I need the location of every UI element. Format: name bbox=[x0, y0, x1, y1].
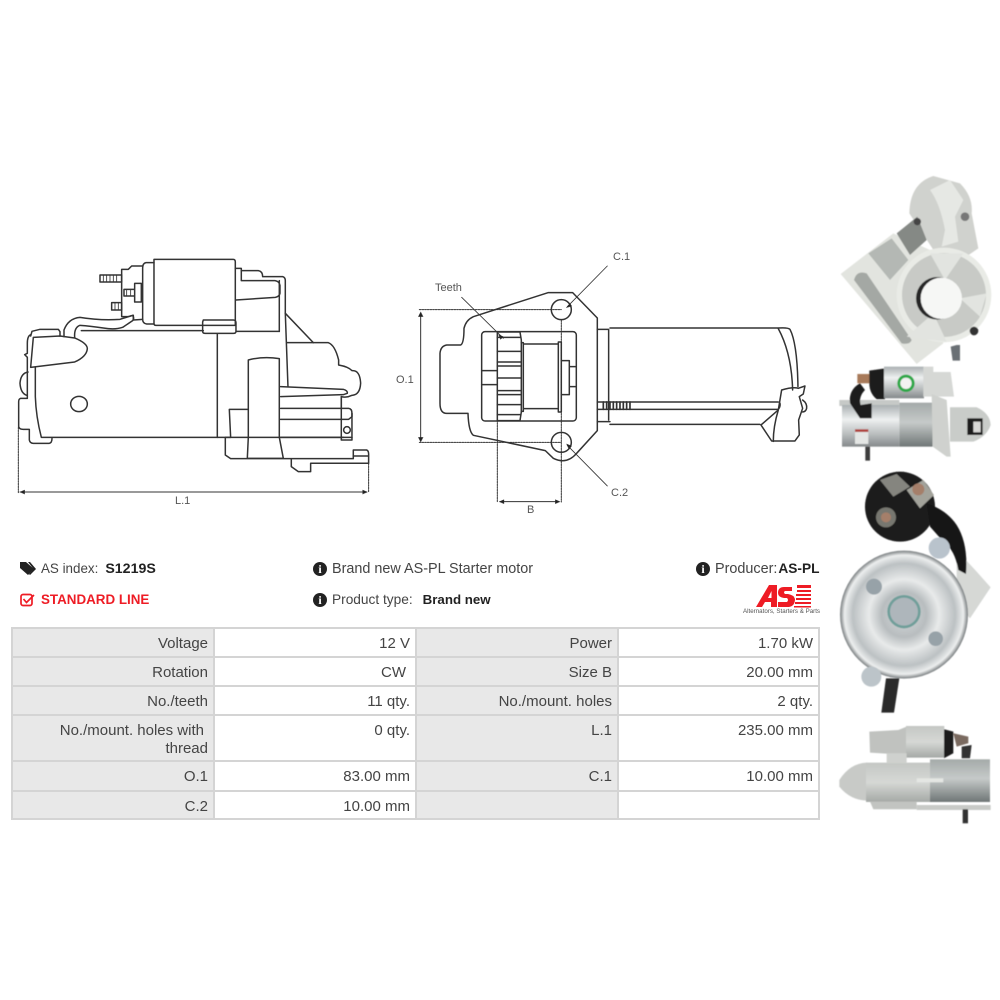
dimension lines bbox=[419, 310, 561, 502]
row: teeth / mount holes bbox=[13, 687, 818, 714]
row: voltage / power bbox=[13, 629, 818, 656]
row: threaded holes / L.1: L.1 bbox=[591, 722, 612, 739]
solenoid bbox=[154, 259, 235, 325]
row: rotation / size B: 20.00 mm bbox=[746, 664, 813, 681]
row: O.1 / C.1 bbox=[13, 762, 818, 790]
drive housing bbox=[285, 313, 313, 343]
photo: starter motor side view with green label bbox=[839, 367, 991, 461]
row: teeth / mount holes: 11 qty. bbox=[367, 693, 410, 710]
row: threaded holes / L.1 bbox=[13, 716, 818, 760]
motor housing bbox=[597, 329, 610, 422]
text: logo tagline: Alternators, Starters & Parts bbox=[743, 608, 820, 615]
row: rotation / size B: Rotation bbox=[152, 664, 208, 681]
row: rotation / size B: CW bbox=[381, 664, 406, 681]
text: drawing label Teeth: Teeth bbox=[435, 282, 462, 294]
text: standard line: STANDARD LINE bbox=[41, 592, 149, 607]
row: rotation / size B: Size B bbox=[569, 664, 612, 681]
photo: starter motor rear view with solenoid bbox=[840, 472, 991, 713]
text: brand new starter motor: Brand new AS-PL Starter motor bbox=[332, 561, 533, 577]
L.1 dimension lines bbox=[18, 427, 369, 493]
row: voltage / power: Power bbox=[569, 635, 612, 652]
specification table bbox=[11, 627, 820, 820]
row: voltage / power: Voltage bbox=[158, 635, 208, 652]
row: teeth / mount holes: No./mount. holes bbox=[499, 693, 612, 710]
row: teeth / mount holes: 2 qty. bbox=[777, 693, 813, 710]
row: O.1 / C.1: C.1 bbox=[589, 768, 612, 785]
row: C.2 bbox=[13, 792, 818, 818]
text: brand new starter motor: i bbox=[318, 562, 322, 576]
motor body bbox=[64, 315, 134, 337]
text: drawing label C.1: C.1 bbox=[613, 251, 630, 263]
row: threaded holes / L.1: 0 qty. bbox=[374, 722, 410, 739]
mounting flange bbox=[440, 293, 597, 461]
row: rotation / size B bbox=[13, 658, 818, 685]
text: producer: Producer:AS-PL bbox=[715, 561, 819, 577]
pinion bbox=[497, 332, 521, 421]
row: threaded holes / L.1: No./mount. holes with bbox=[60, 722, 204, 739]
row: C.2: 10.00 mm bbox=[343, 798, 410, 815]
icon: tag bbox=[20, 562, 36, 575]
row: teeth / mount holes: No./teeth bbox=[147, 693, 208, 710]
text: AS index: AS index: S1219S bbox=[41, 561, 156, 577]
photo: starter motor side view (opposite) bbox=[839, 726, 991, 823]
row: voltage / power: 1.70 kW bbox=[758, 635, 813, 652]
row: threaded holes / L.1: 235.00 mm bbox=[738, 722, 813, 739]
icon: checked box bbox=[21, 594, 34, 606]
text: drawing label L.1: L.1 bbox=[175, 495, 190, 507]
text: drawing label B: B bbox=[527, 504, 534, 516]
row: O.1 / C.1: 10.00 mm bbox=[746, 768, 813, 785]
text: product type: i bbox=[318, 593, 322, 607]
text: product type: Product type: Brand new bbox=[332, 592, 491, 607]
photo: starter motor end view (drive side) bbox=[841, 176, 991, 364]
drawing: starter motor front view with O.1, B, C.1, C.2, Teeth bbox=[418, 266, 807, 504]
row: O.1 / C.1: O.1 bbox=[184, 768, 208, 785]
row: threaded holes / L.1: thread bbox=[165, 740, 208, 757]
row: voltage / power: 12 V bbox=[379, 635, 410, 652]
logo: AS-PL bbox=[756, 585, 811, 608]
text: drawing label C.2: C.2 bbox=[611, 487, 628, 499]
row: C.2: C.2 bbox=[185, 798, 208, 815]
row: O.1 / C.1: 83.00 mm bbox=[343, 768, 410, 785]
text: drawing label O.1: O.1 bbox=[396, 374, 414, 386]
text: producer: i bbox=[701, 562, 705, 576]
